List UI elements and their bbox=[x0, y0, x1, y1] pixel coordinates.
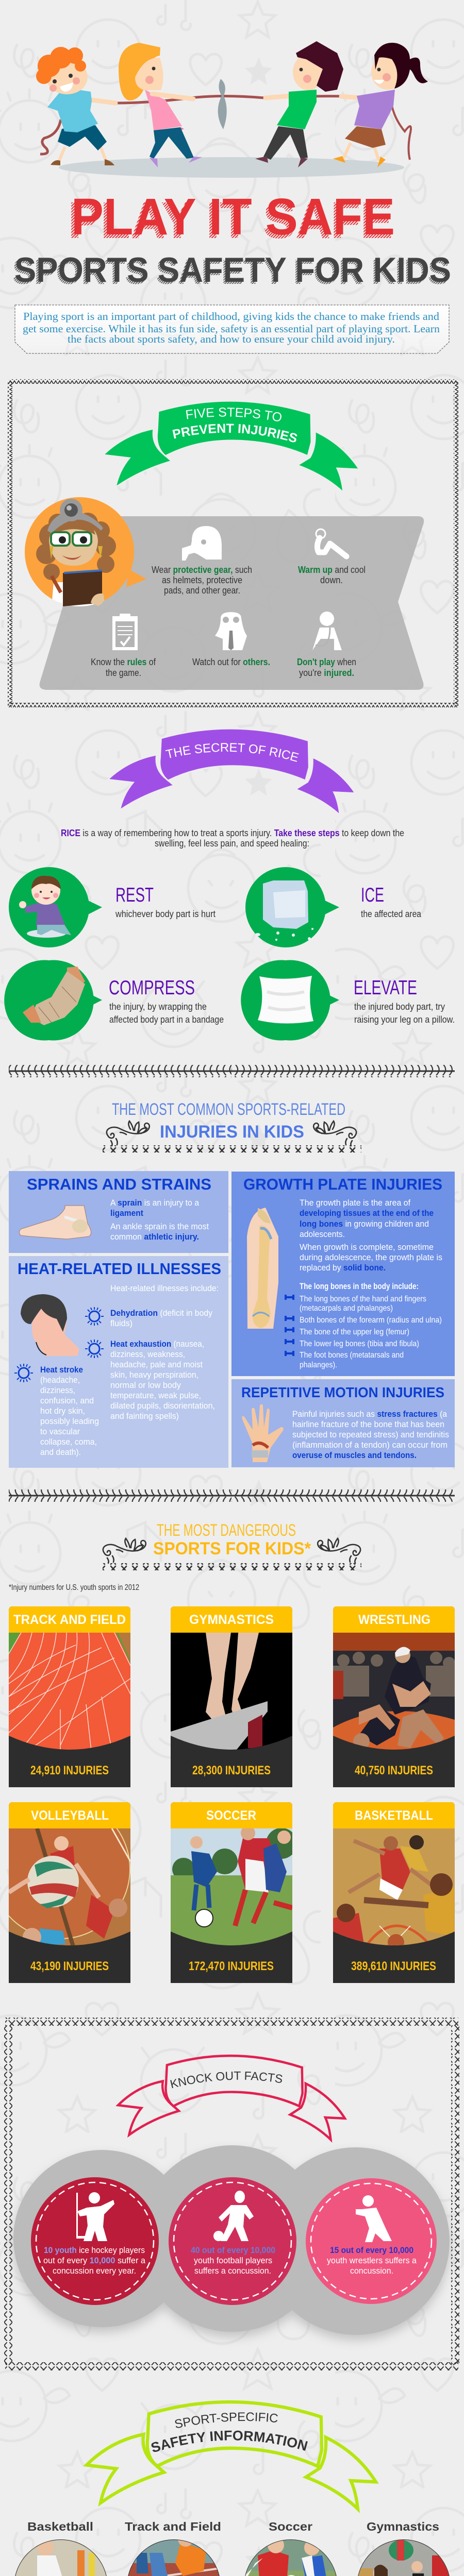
text: dehydration bbox=[110, 1308, 212, 1328]
text: ice bbox=[361, 884, 422, 919]
fact: ice hockey bbox=[31, 2177, 159, 2305]
doctor illustration bbox=[25, 497, 146, 606]
label: basketball: BASKETBALL bbox=[355, 1808, 433, 1823]
icon: clipboard bbox=[112, 614, 138, 650]
text: compress: COMPRESS bbox=[109, 977, 195, 999]
section: sport-specific safety information bbox=[15, 2400, 450, 2576]
banner: safety information: SPORT-SPECIFIC bbox=[175, 2412, 278, 2428]
fact: football bbox=[169, 2177, 296, 2305]
text: ice hockey concussion fact bbox=[43, 2245, 146, 2276]
text: know the rules bbox=[91, 657, 156, 678]
fact: wrestling bbox=[306, 2178, 437, 2304]
ice bbox=[245, 867, 422, 947]
text: rest bbox=[115, 884, 216, 919]
heading: most common sports-related injuries in kids: THE MOST COMMON SPORTS-RELATED bbox=[112, 1100, 345, 1118]
text: heat stroke: dizziness, bbox=[40, 1385, 75, 1395]
panel: knock out facts bbox=[4, 2018, 459, 2370]
text: elevate bbox=[354, 977, 455, 1025]
card: volleyball bbox=[0, 1800, 130, 1983]
photo: children playing soccer bbox=[244, 2537, 338, 2576]
list: long bones: (metacarpals and phalanges) bbox=[300, 1304, 393, 1313]
text: warm up: Warm up and cool bbox=[298, 565, 366, 575]
icon: resting child bbox=[9, 867, 102, 947]
text: repetitive injury description: Painful injuries such as stress fractures (a bbox=[292, 1409, 447, 1419]
text: rest: REST bbox=[115, 884, 154, 906]
stat: track and field injuries: 24,910 INJURIES bbox=[30, 1764, 109, 1777]
panel: five steps to prevent injuries bbox=[8, 379, 458, 707]
text: ice hockey concussion fact: out of every 10,000 suffer a bbox=[43, 2256, 146, 2265]
image: sprained ankle bbox=[19, 1206, 91, 1239]
text: sprain definition: A sprain is an injury to a bbox=[110, 1198, 200, 1208]
text: sprain definition: ligament bbox=[110, 1208, 143, 1218]
column: basketball bbox=[15, 2522, 107, 2576]
compress bbox=[4, 960, 224, 1041]
text: warm up bbox=[298, 565, 366, 585]
text: dehydration: Dehydration (deficit in body bbox=[110, 1308, 212, 1318]
banner: five steps bbox=[105, 402, 358, 490]
stat: wrestling injuries: 40,750 INJURIES bbox=[355, 1764, 433, 1777]
heading: gymnastics: Gymnastics bbox=[367, 2520, 439, 2533]
heading: track and field: Track and Field bbox=[125, 2520, 221, 2533]
text: compress bbox=[109, 977, 224, 1025]
text: football concussion fact bbox=[191, 2245, 275, 2276]
text: heat exhaustion: headache, pale and moist bbox=[110, 1360, 203, 1369]
text: sprain definition: common athletic injury. bbox=[110, 1232, 199, 1242]
icon: hockey player bbox=[76, 2192, 114, 2241]
text: heat exhaustion: temperature, weak pulse, bbox=[110, 1391, 201, 1400]
text: repetitive injury description: overuse of muscles and tendons. bbox=[292, 1450, 417, 1460]
text: growth plate definition: developing tissues at the end of the bbox=[300, 1208, 434, 1218]
text: wrestling concussion fact: concussion. bbox=[350, 2266, 393, 2276]
text: do not play injured: Don't play when bbox=[297, 657, 356, 667]
banner: the secret of rice: THE SECRET OF RICE bbox=[165, 743, 299, 762]
text: do not play injured bbox=[297, 657, 356, 678]
heading: sprains and strains: SPRAINS AND STRAINS bbox=[27, 1175, 211, 1193]
list: long bones: phalanges). bbox=[300, 1361, 337, 1369]
banner: safety information: SAFETY INFORMATION bbox=[152, 2431, 308, 2452]
icon: sun bbox=[14, 1364, 33, 1382]
footnote: *Injury numbers for U.S. youth sports in 2012 bbox=[9, 1583, 139, 1592]
heading: most common sports-related injuries in kids: INJURIES IN KIDS bbox=[160, 1122, 304, 1142]
heading: most dangerous sports for kids: SPORTS FOR KIDS* bbox=[153, 1539, 311, 1558]
label: gymnastics: GYMNASTICS bbox=[189, 1613, 274, 1627]
stat: basketball injuries: 389,610 INJURIES bbox=[351, 1959, 436, 1973]
text: growth plate definition: long bones in growing children and bbox=[300, 1219, 429, 1229]
text: protective gear: as helmets, protective bbox=[162, 575, 242, 585]
text: sprain definition bbox=[110, 1198, 209, 1242]
grey steps panel bbox=[40, 516, 424, 690]
banner: the secret of rice bbox=[106, 728, 354, 813]
card: gymnastics bbox=[171, 1606, 292, 1787]
panel: heat-related illnesses bbox=[9, 1256, 228, 1468]
title: play it safe: PLAY IT SAFE bbox=[68, 192, 393, 249]
icon: injured person bbox=[312, 612, 342, 650]
text: dehydration: fluids) bbox=[110, 1318, 132, 1328]
text: protective gear bbox=[152, 565, 252, 596]
banner: five steps: PREVENT INJURIES bbox=[172, 423, 297, 442]
text: elevate: ELEVATE bbox=[354, 977, 417, 999]
text: heat exhaustion: skin, heavy perspiration, bbox=[110, 1370, 198, 1380]
text: repetitive injury description: subjected to repeated stress) and tendinitis bbox=[292, 1430, 449, 1439]
icon: sun bbox=[85, 1340, 104, 1358]
text: heat stroke bbox=[40, 1365, 99, 1457]
text: compress: affected body part in a bandage bbox=[109, 1014, 224, 1025]
icon: football player bbox=[213, 2191, 254, 2241]
icon: wrestler bbox=[356, 2195, 392, 2242]
list: long bones: The foot bones (metatarsals and bbox=[300, 1351, 404, 1360]
text: heat stroke: collapse, coma, bbox=[40, 1437, 97, 1447]
panel: sprains and strains bbox=[9, 1171, 228, 1253]
text: rice introduction: swelling, feel less pain, and speed healing: bbox=[155, 838, 309, 849]
text: ice hockey concussion fact: 10 youth ice hockey players bbox=[44, 2245, 145, 2255]
text: wrestling concussion fact: 15 out of every 10,000 bbox=[330, 2245, 413, 2255]
label: soccer: SOCCER bbox=[206, 1808, 256, 1823]
heading: basketball: Basketball bbox=[27, 2520, 93, 2533]
text: football concussion fact: 40 out of every 10,000 bbox=[191, 2245, 275, 2255]
text: ice hockey concussion fact: concussion every year. bbox=[53, 2266, 136, 2276]
icon: sun bbox=[85, 1307, 104, 1326]
text: growth plate definition: The growth plate is the area of bbox=[300, 1198, 410, 1208]
heading: heat-related illnesses: HEAT-RELATED ILLNESSES bbox=[18, 1260, 221, 1278]
text: heat stroke: and death). bbox=[40, 1447, 81, 1457]
text: heat stroke: Heat stroke bbox=[40, 1365, 83, 1375]
list: long bones: The long bones in the body include: bbox=[300, 1281, 419, 1291]
heading: soccer: Soccer bbox=[269, 2520, 312, 2533]
text: warm up: down. bbox=[320, 575, 343, 585]
text: heat exhaustion bbox=[110, 1339, 215, 1421]
text: football concussion fact: youth football players bbox=[194, 2256, 272, 2265]
text: growth plate definition: replaced by solid bone. bbox=[300, 1263, 386, 1273]
text: rice introduction bbox=[61, 828, 404, 849]
text: repetitive injury description: hairline fracture of the bone that has been bbox=[292, 1419, 444, 1429]
text: heat exhaustion: and fainting spells) bbox=[110, 1411, 179, 1421]
banner: safety information bbox=[83, 2400, 379, 2513]
photo: children sprinting on a track bbox=[128, 2539, 220, 2576]
text: heat exhaustion: dilated pupils, disorientation, bbox=[110, 1401, 215, 1411]
text: heat exhaustion: dizziness, weakness, bbox=[110, 1349, 185, 1359]
text: heat stroke: confusion, and bbox=[40, 1396, 94, 1405]
section: the secret of rice bbox=[4, 728, 455, 1041]
text: heat stroke: (headache, bbox=[40, 1375, 80, 1385]
text: growth plate definition: during adolescence, the growth plate is bbox=[300, 1252, 442, 1262]
heading: repetitive motion injuries: REPETITIVE MOTION INJURIES bbox=[241, 1384, 444, 1400]
heading: growth plate injuries: GROWTH PLATE INJURIES bbox=[243, 1175, 442, 1193]
text: wrestling concussion fact bbox=[327, 2245, 417, 2276]
text: protective gear: pads, and other gear. bbox=[164, 585, 240, 596]
heading: most dangerous sports for kids: THE MOST DANGEROUS bbox=[157, 1521, 296, 1539]
text: heat stroke: to vascular bbox=[40, 1427, 80, 1436]
icon: bandaged foot bbox=[4, 960, 102, 1041]
text: elevate: raising your leg on a pillow. bbox=[354, 1014, 455, 1025]
title: play it safe: PLAY IT SAFE bbox=[71, 188, 395, 246]
text: heat exhaustion: Heat exhaustion (nausea, bbox=[110, 1339, 204, 1349]
intro text box bbox=[15, 305, 449, 353]
column: track and field bbox=[123, 2520, 224, 2576]
list: long bones bbox=[285, 1281, 442, 1369]
text: elevate: the injured body part, try bbox=[354, 1002, 445, 1012]
text: ice: the affected area bbox=[361, 909, 422, 919]
stat: volleyball injuries: 43,190 INJURIES bbox=[30, 1959, 109, 1973]
label: track and field: TRACK AND FIELD bbox=[13, 1613, 126, 1627]
text: repetitive injury description bbox=[292, 1409, 449, 1460]
card: wrestling bbox=[333, 1606, 455, 1787]
list: long bones: Both bones of the forearm (radius and ulna) bbox=[300, 1316, 442, 1325]
column: gymnastics bbox=[358, 2522, 450, 2576]
heading: most common sports-related injuries in kids bbox=[103, 1100, 361, 1153]
image: injured hand bbox=[242, 1404, 284, 1462]
icon: ice cube bbox=[245, 867, 339, 947]
image: leg bones bbox=[247, 1208, 278, 1329]
label: wrestling: WRESTLING bbox=[358, 1613, 430, 1627]
text: growth plate definition: adolescents. bbox=[300, 1229, 345, 1239]
text: compress: the injury, by wrapping the bbox=[109, 1002, 207, 1012]
icon: pillow bbox=[241, 960, 339, 1041]
text: growth plate definition bbox=[300, 1198, 442, 1273]
card: basketball bbox=[333, 1802, 455, 1983]
banner: knock out facts: KNOCK OUT FACTS bbox=[170, 2071, 283, 2089]
text: protective gear: Wear protective gear, such bbox=[152, 565, 252, 575]
text: know the rules: Know the rules of bbox=[91, 657, 156, 667]
text: wrestling concussion fact: youth wrestlers suffers a bbox=[327, 2256, 417, 2265]
grey scalloped backdrop bbox=[13, 2145, 450, 2340]
icon: football helmet bbox=[182, 526, 222, 561]
icon: sit-up bbox=[316, 529, 346, 556]
text: growth plate definition: When growth is complete, sometime bbox=[300, 1242, 434, 1252]
intro text box: Playing sport is an important part of childhood, giving kids the chance to make friends and bbox=[23, 310, 440, 323]
illustration: children playing tug of war bbox=[36, 41, 428, 178]
card: soccer bbox=[171, 1802, 297, 1983]
panel: growth plate injuries bbox=[231, 1172, 455, 1376]
icon: referee figure bbox=[215, 612, 247, 650]
stat: gymnastics injuries: 28,300 INJURIES bbox=[192, 1764, 271, 1777]
list: long bones: The bone of the upper leg (femur) bbox=[300, 1328, 409, 1336]
list: long bones: The long bones of the hand and fingers bbox=[300, 1295, 426, 1303]
panel: repetitive motion injuries bbox=[231, 1379, 455, 1467]
text: rest: whichever body part is hurt bbox=[115, 909, 216, 919]
text: sprain definition: An ankle sprain is the most bbox=[110, 1222, 209, 1231]
column: soccer bbox=[245, 2522, 337, 2576]
photo: child dribbling basketball bbox=[14, 2539, 108, 2576]
text: rice introduction: RICE is a way of remembering how to treat a sports injury. Take these steps to keep down the bbox=[61, 828, 404, 838]
panel: heat-related illnesses: Heat-related illnesses include: bbox=[110, 1283, 219, 1293]
text: do not play injured: you're injured. bbox=[299, 668, 354, 678]
label: volleyball: VOLLEYBALL bbox=[31, 1808, 109, 1823]
heading: most dangerous sports for kids bbox=[103, 1521, 361, 1570]
text: football concussion fact: suffers a concussion. bbox=[194, 2266, 271, 2276]
stat: soccer injuries: 172,470 INJURIES bbox=[189, 1959, 274, 1973]
intro text box: get some exercise. While it has its fun side, safety is an essential part of playing sport. Learn bbox=[23, 323, 440, 335]
text: know the rules: the game. bbox=[106, 668, 141, 678]
text: heat stroke: hot dry skin, bbox=[40, 1406, 85, 1416]
image: overheated boy bbox=[21, 1294, 79, 1356]
elevate bbox=[241, 960, 455, 1041]
text: repetitive injury description: (inflammation of a tendon) can occur from bbox=[292, 1440, 448, 1450]
text: watch out for others: Watch out for others. bbox=[192, 657, 270, 667]
text: ice: ICE bbox=[361, 884, 384, 906]
photo: girls on a gymnastics mat bbox=[357, 2539, 451, 2576]
list: long bones: The lower leg bones (tibia and fibula) bbox=[300, 1340, 419, 1348]
intro text box: the facts about sports safety, and how to ensure your child avoid injury. bbox=[68, 333, 395, 345]
rest bbox=[9, 867, 216, 947]
banner: five steps: FIVE STEPS TO bbox=[186, 408, 281, 421]
text: heat exhaustion: normal or low body bbox=[110, 1380, 181, 1390]
card: track and field bbox=[9, 1606, 130, 1787]
text: heat stroke: possibly leading bbox=[40, 1416, 99, 1426]
banner: knock out facts bbox=[115, 2055, 347, 2143]
